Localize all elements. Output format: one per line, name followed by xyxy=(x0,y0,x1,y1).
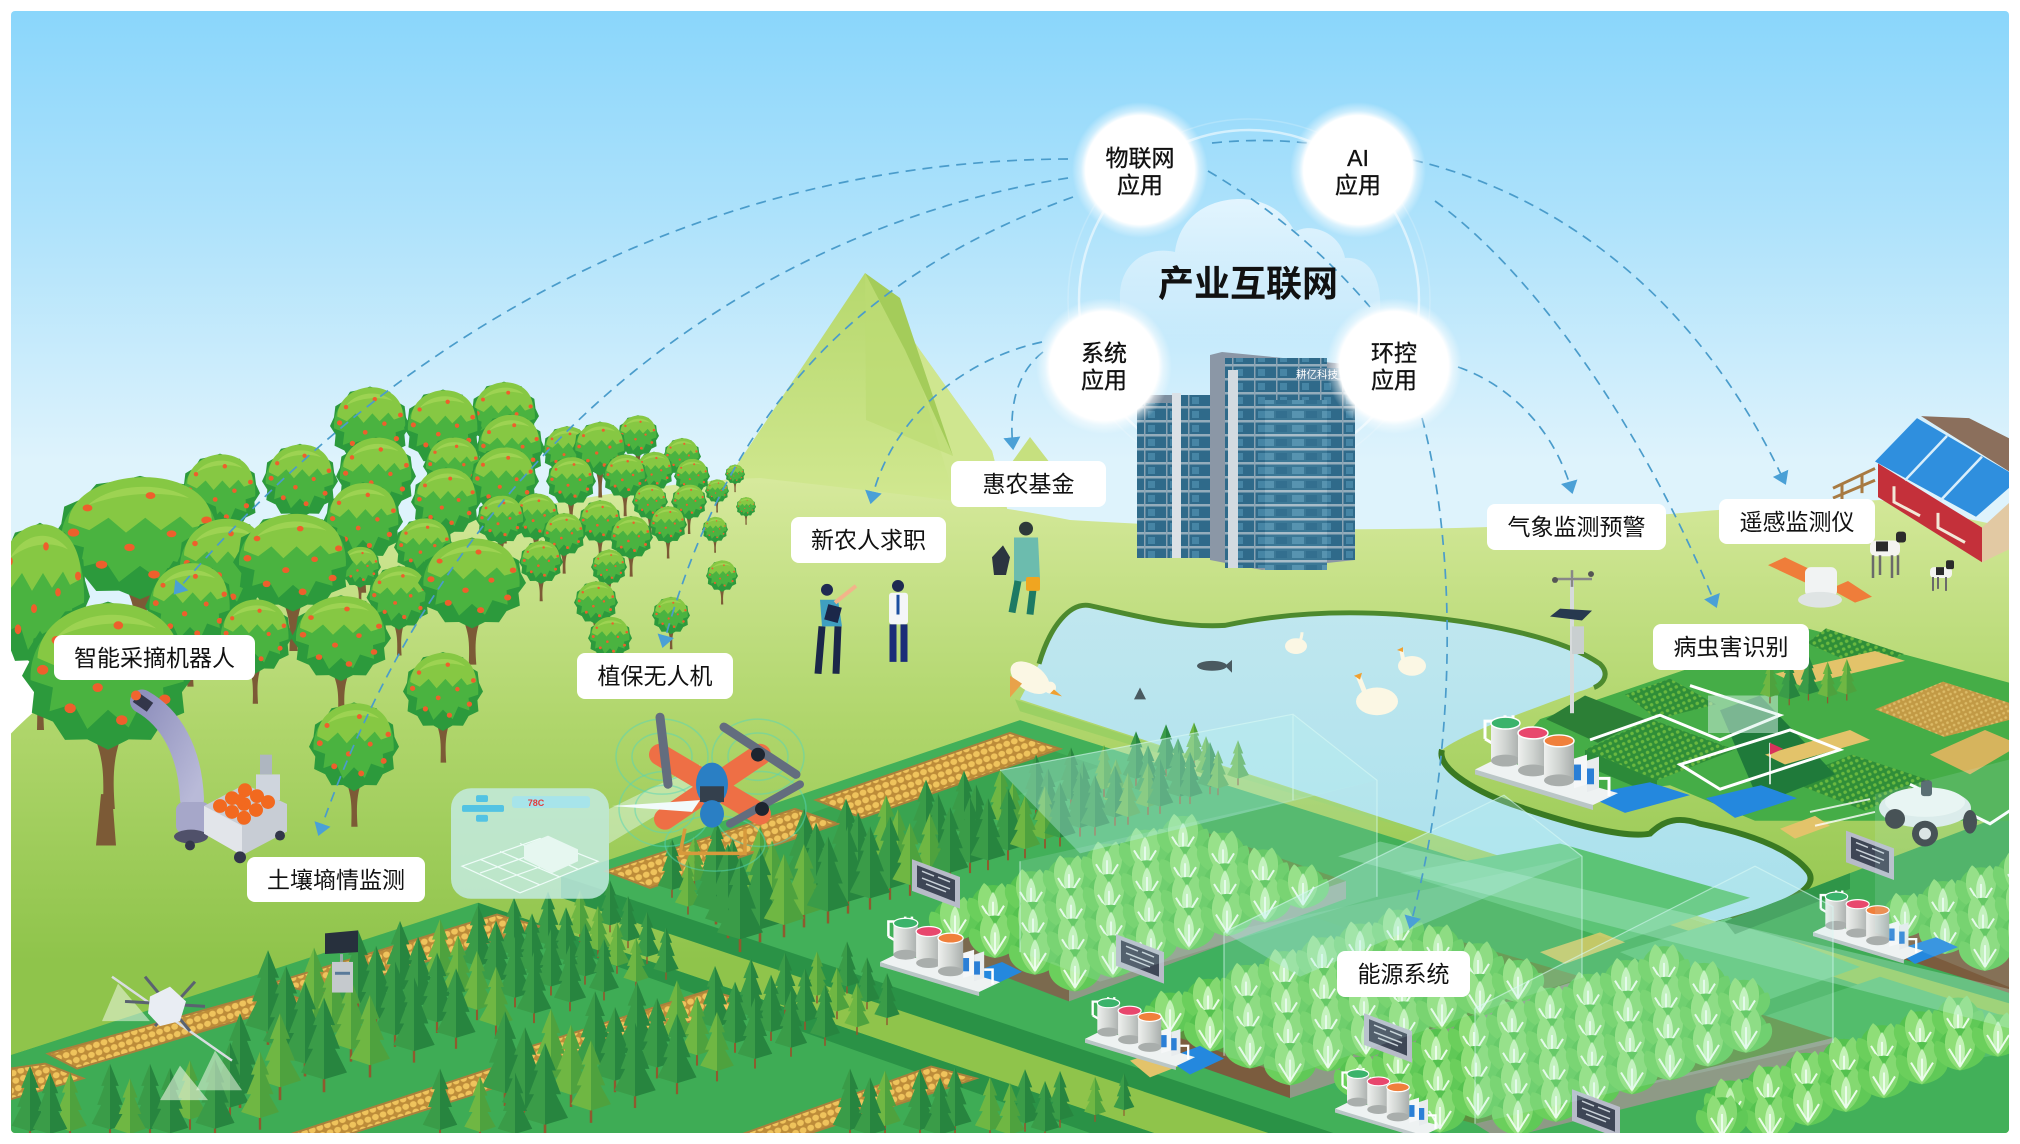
spraying drone xyxy=(102,977,242,1100)
label: weather warning xyxy=(1487,504,1666,550)
grass ground xyxy=(0,478,2020,1144)
pine rows: greenhouse field xyxy=(658,722,1249,952)
application bubble: AI xyxy=(1290,102,1426,238)
label: new farmer jobs: 新农人求职 xyxy=(811,527,926,553)
irrigation units and water tiles xyxy=(880,891,1958,1139)
fish xyxy=(1134,660,1232,699)
application bubble: AI: 应用 xyxy=(1335,172,1381,198)
title: 产业互联网 xyxy=(1158,263,1338,304)
lettuce bed C xyxy=(1334,944,1833,1140)
company building xyxy=(1137,352,1355,570)
application bubble: systems: 应用 xyxy=(1081,367,1127,393)
application bubble: systems xyxy=(1036,298,1172,434)
large tanks on right farm xyxy=(1475,715,1618,810)
panel readout: 78C xyxy=(528,798,545,808)
application bubble: environment control: 应用 xyxy=(1371,367,1417,393)
label: weather warning: 气象监测预警 xyxy=(1508,514,1646,540)
farmers talking xyxy=(818,580,908,674)
barn with solar roof xyxy=(1833,416,2020,562)
label: pest identification xyxy=(1653,624,1809,670)
industrial internet cloud ring xyxy=(1068,118,1430,434)
right farm platform xyxy=(1725,820,2009,1004)
picking robot xyxy=(131,691,287,863)
mountain xyxy=(727,273,1048,509)
remote sensing satellite xyxy=(1768,557,1872,608)
weather station xyxy=(1550,570,1594,713)
cloud xyxy=(1120,199,1380,317)
application bubble: environment control: 环控 xyxy=(1371,340,1417,366)
lettuce bed E xyxy=(1886,852,2009,993)
dairy cows xyxy=(1870,532,1954,591)
lower grass bank xyxy=(1015,699,1725,924)
drone control panel xyxy=(451,788,609,899)
patrol robot xyxy=(1810,780,1977,846)
right farm fields xyxy=(1500,628,2020,839)
main farm platform xyxy=(561,720,2020,1144)
corn strips xyxy=(11,733,1060,1140)
landscape scene xyxy=(0,382,2020,1144)
control screens xyxy=(912,831,1894,1139)
lettuce bed B xyxy=(1144,908,1585,1098)
label: energy system xyxy=(1337,951,1470,997)
label: farm fund: 惠农基金 xyxy=(982,471,1074,497)
label: plant protection drone xyxy=(577,653,733,699)
dashed arrows from IoT applications xyxy=(175,140,1370,834)
label: farm fund xyxy=(951,461,1106,507)
label: soil moisture: 土壤墒情监测 xyxy=(267,867,405,893)
label: picking robot xyxy=(54,635,255,680)
orange tree orchard xyxy=(0,382,756,845)
application bubble: IoT: 应用 xyxy=(1117,172,1163,198)
label: energy system: 能源系统 xyxy=(1358,961,1450,987)
dashed arrows from AI and environment control xyxy=(1410,160,1785,927)
label: new farmer jobs xyxy=(791,517,946,563)
small pines on right farm xyxy=(1760,655,1857,705)
application bubble: systems: 系统 xyxy=(1081,340,1127,366)
label: remote sensing xyxy=(1719,499,1875,544)
plant protection drone xyxy=(609,717,806,871)
application bubble: IoT: 物联网 xyxy=(1106,145,1174,171)
label: soil moisture xyxy=(247,857,425,902)
lettuce bed D xyxy=(1696,995,2020,1140)
soil moisture sensor xyxy=(325,930,358,993)
application bubble: AI: AI xyxy=(1347,145,1369,171)
lower-left farm platform xyxy=(0,903,1156,1144)
label: pest identification: 病虫害识别 xyxy=(1674,634,1788,660)
farmer receiving fund xyxy=(992,522,1040,615)
application bubble: IoT xyxy=(1072,102,1208,238)
duck and geese on the pond xyxy=(1005,632,1426,715)
application bubble: environment control xyxy=(1326,298,1462,434)
pine rows: lower-left field xyxy=(12,880,1134,1144)
label: remote sensing: 遥感监测仪 xyxy=(1740,509,1854,535)
pond xyxy=(1020,605,1811,924)
label: picking robot: 智能采摘机器人 xyxy=(74,645,235,671)
sky background xyxy=(11,11,2009,611)
lettuce bed A xyxy=(929,814,1346,1001)
building logo text: 耕亿科技 xyxy=(1296,368,1338,381)
greenhouse glass covers xyxy=(1000,714,2020,1124)
dashed arrows from system applications xyxy=(871,342,1043,502)
label: plant protection drone: 植保无人机 xyxy=(598,663,712,689)
